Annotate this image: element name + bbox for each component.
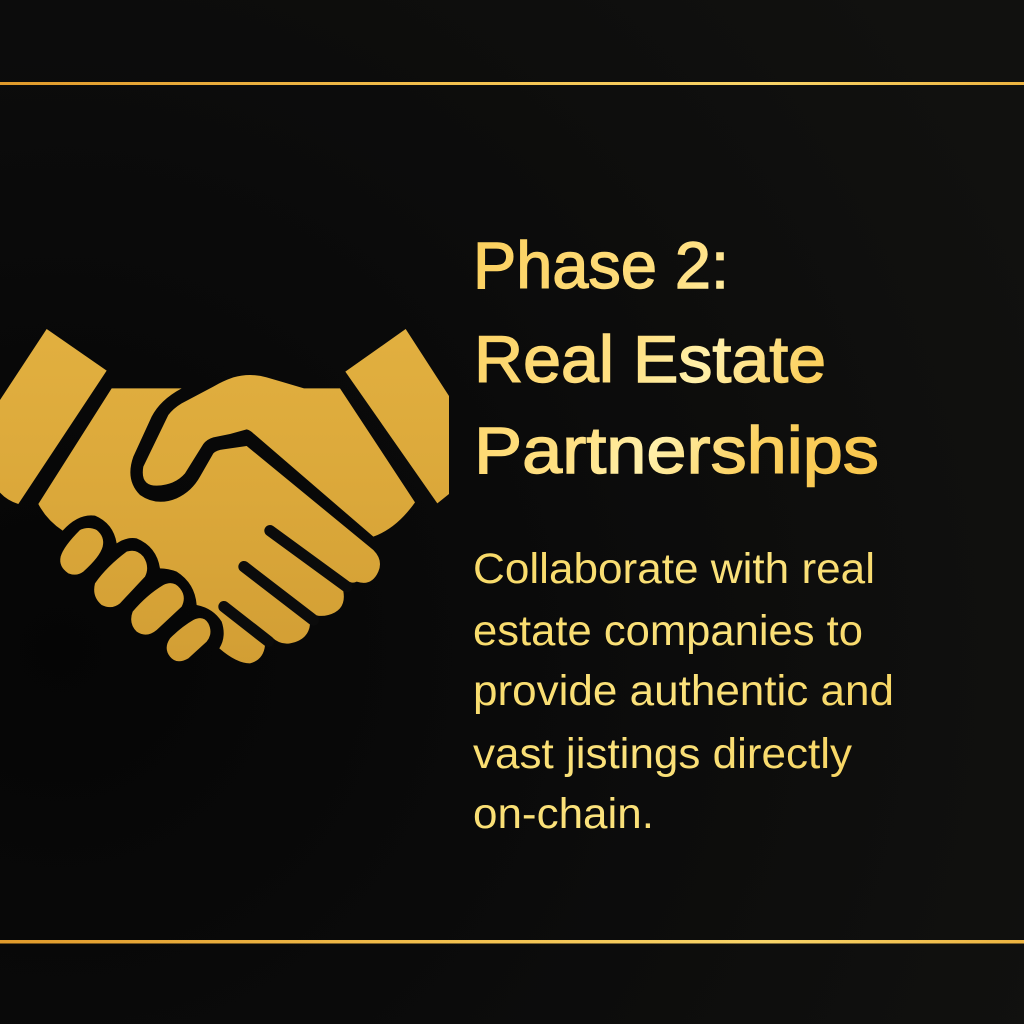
body text: on-chain.: [473, 790, 654, 838]
clasping finger 2: [94, 551, 147, 607]
finger grooves: [224, 531, 347, 641]
heading: Real Estate: [474, 322, 826, 396]
body text: provide authentic and: [473, 667, 894, 715]
icon: handshake: [0, 329, 449, 663]
lower left hand with fingers: [38, 388, 380, 663]
upper right hand with thumb: [143, 375, 415, 537]
body text: estate companies to: [473, 607, 863, 655]
body text: Collaborate with real: [473, 545, 875, 593]
clasping finger 4: [167, 618, 210, 661]
top gold rule: [0, 82, 1024, 85]
body text: vast jistings directly: [473, 730, 852, 778]
clasping finger 3: [131, 583, 184, 635]
clasping finger 1: [60, 528, 103, 575]
heading: [473, 228, 879, 487]
bottom gold rule: [0, 940, 1024, 944]
heading: Partnerships: [474, 413, 879, 487]
body text: [473, 545, 894, 838]
heading: Phase 2:: [473, 228, 729, 302]
right cuff: [345, 329, 449, 503]
left cuff: [0, 329, 107, 504]
